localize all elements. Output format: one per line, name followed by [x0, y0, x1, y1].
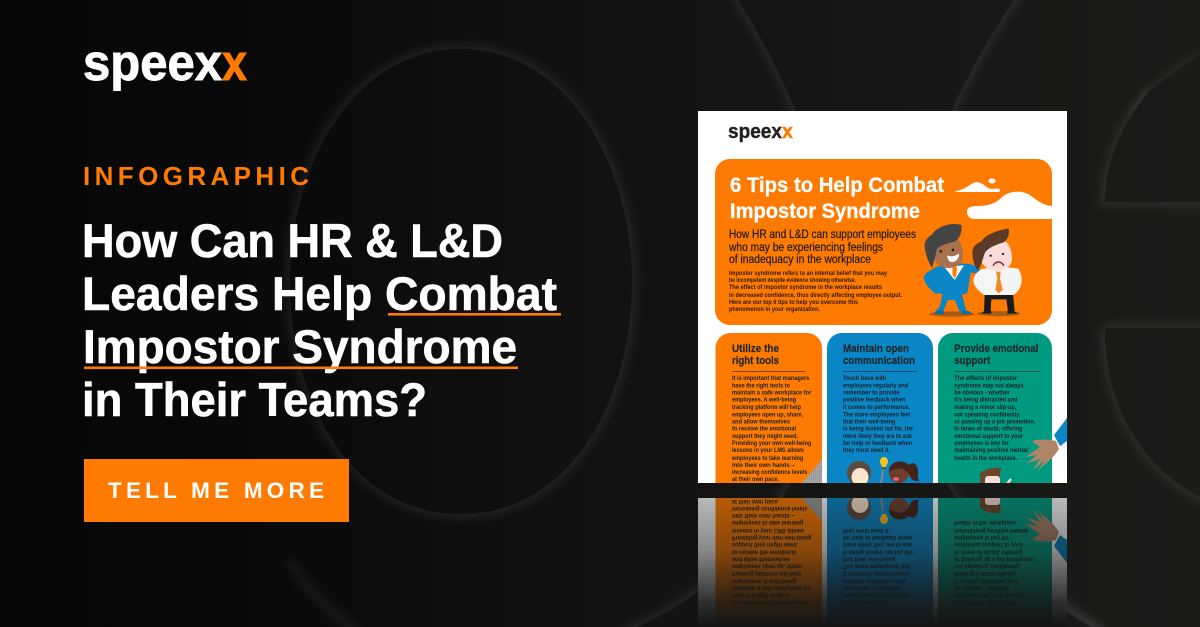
tip body: remember to provide [843, 390, 900, 397]
hero intro text: in decreased confidence, thus directly affecting employee output. [729, 292, 902, 299]
reflection of the infographic card: they most need it. [843, 527, 890, 534]
reflection of the infographic card: Providing your own well-being [732, 534, 811, 541]
illustration: two colleagues [924, 224, 1022, 317]
reflection of the infographic card: It is important that managers [732, 599, 810, 606]
reflection of the infographic card: maintaining positive mental [954, 527, 1028, 534]
tip body: that their well-being [843, 419, 895, 426]
reflection of the infographic card: maintain a safe workplace for [732, 584, 812, 591]
reflection of the infographic card: that their well-being [843, 555, 895, 562]
reflection of the infographic card: to receive the emotional [732, 548, 796, 555]
tip body: tracking platform will help [732, 404, 801, 411]
reflection of the infographic card: employees is key for [954, 534, 1009, 541]
tip body [954, 375, 1035, 462]
tip body: maintaining positive mental [954, 447, 1028, 454]
tip body: support they might need. [732, 433, 798, 440]
tip body: employees. A well-being [732, 397, 796, 404]
tip body: be obvious - whether [954, 390, 1010, 397]
icon: page corner [801, 460, 822, 484]
tip heading: communication [843, 355, 915, 367]
hero subtitle: How HR and L&D can support employees [729, 227, 916, 241]
tip body: for help or feedback when [843, 440, 912, 447]
reflection of the infographic card: be obvious - whether [954, 584, 1010, 591]
hero intro text: Here are our top 6 tips to help you overcome this [729, 299, 858, 306]
hero intro text: be incompetent despite evidence showing otherwise. [729, 277, 856, 284]
infographic preview card [698, 111, 1067, 523]
tip body: more likely they are to ask [843, 433, 912, 440]
hero intro text: Impostor syndrome refers to an internal belief that you may [729, 270, 887, 277]
call to action button [84, 459, 349, 522]
reflection of the infographic card: making a minor slip-up, [954, 570, 1016, 577]
call to action button: TELL ME MORE [108, 478, 324, 503]
tip body: it comes to performance. [843, 404, 910, 411]
reflection of the infographic card: employees open up, share, [732, 563, 803, 570]
reflection of the infographic card: into their own hands – [732, 512, 795, 519]
card logo: speex [728, 120, 783, 143]
tip body: increasing confidence levels [732, 469, 808, 476]
headline [82, 214, 561, 426]
hero intro text: phenomenon in your organization. [729, 306, 820, 313]
speexx logo: speex [83, 34, 222, 91]
hero subtitle: of inadequacy in the workplace [729, 252, 871, 266]
tip body: not speaking confidently, [954, 411, 1020, 418]
tip body: at their own pace. [732, 476, 779, 483]
tip heading [843, 344, 914, 364]
hero panel [715, 159, 1052, 325]
reflection of the infographic card: have the right tools to [732, 591, 790, 598]
tip body: The more employees feel [843, 411, 910, 418]
reflection of the infographic card: lessons in your LMS allows [732, 527, 804, 534]
reflection of the infographic card: at their own pace. [732, 498, 779, 505]
supportive colleague [924, 224, 980, 314]
tip body: The effects of impostor [954, 375, 1017, 382]
card logo: x [782, 120, 794, 143]
tip body: Providing your own well-being [732, 440, 811, 447]
headline: How Can HR & L&D [82, 214, 503, 267]
tip body: employees open up, share, [732, 411, 803, 418]
hero title: 6 Tips to Help Combat [730, 173, 944, 197]
tip body: they most need it. [843, 447, 890, 454]
reflection of the infographic card: increasing confidence levels [732, 505, 808, 512]
tip body [732, 375, 812, 483]
tip panel: utilize the right tools [716, 333, 822, 483]
reflection of the infographic card: The more employees feel [843, 563, 910, 570]
tip panel: provide emotional support [938, 333, 1067, 483]
reflection of the infographic card: it's being distracted and [954, 577, 1017, 584]
tip heading: Utilize the [732, 343, 779, 355]
tip body: into their own hands – [732, 462, 795, 469]
hero subtitle [728, 227, 916, 266]
reflection of the infographic card: is being looked out for, the [843, 548, 913, 555]
tip body: emotional support to your [954, 433, 1023, 440]
reflection of the infographic card: not speaking confidently, [954, 563, 1020, 570]
card logo [728, 126, 794, 142]
tip body: syndrome may not always [954, 383, 1024, 390]
tip panel: maintain open communication [827, 333, 933, 483]
headline: Leaders Help Combat [82, 267, 557, 320]
reflection of the infographic card: for help or feedback when [843, 534, 912, 541]
tip body: Touch base with [843, 375, 886, 382]
tip body: have the right tools to [732, 383, 790, 390]
tip heading [954, 343, 1038, 367]
tip body: employees is key for [954, 440, 1009, 447]
headline: in Their Teams? [82, 373, 427, 426]
tip body: positive feedback when [843, 397, 905, 404]
tip body: to receive the emotional [732, 426, 796, 433]
reflection of the infographic card: employees regularly and [843, 591, 908, 598]
reflection of the infographic card: or passing up a job promotion. [954, 555, 1035, 562]
illustration: small figure [980, 468, 1011, 485]
illustration: two women with light bulb [847, 457, 919, 483]
tip body: employees regularly and [843, 383, 908, 390]
tip heading: Maintain open [843, 343, 909, 355]
tip body: lessons in your LMS allows [732, 447, 804, 454]
tip body: health in the workplace. [954, 455, 1017, 462]
tip body: maintain a safe workplace for [732, 390, 812, 397]
hero title: Impostor Syndrome [730, 199, 920, 223]
reflection of the infographic card: employees to take learning [732, 519, 803, 526]
tip body: making a minor slip-up, [954, 404, 1016, 411]
reflection of the infographic card [698, 498, 1067, 621]
speexx logo: x [222, 34, 247, 91]
reflection of the infographic card: and allow themselves [732, 555, 790, 562]
tip body: is being looked out for, the [843, 426, 913, 433]
headline: Impostor Syndrome [83, 320, 517, 373]
tip body: it's being distracted and [954, 397, 1017, 404]
reflection of the infographic card: health in the workplace. [954, 519, 1017, 526]
reflection of the infographic card: remember to provide [843, 584, 900, 591]
reflection of the infographic card: emotional support to your [954, 541, 1023, 548]
reflection of the infographic card: it comes to performance. [843, 570, 910, 577]
tip body: employees to take learning [732, 455, 803, 462]
reflection of the infographic card: positive feedback when [843, 577, 905, 584]
hero subtitle: who may be experiencing feelings [728, 240, 883, 254]
tip body: or passing up a job promotion. [954, 419, 1035, 426]
tip heading: Provide emotional [954, 343, 1038, 355]
worried colleague [972, 229, 1022, 314]
tip body: and allow themselves [732, 419, 790, 426]
reflection of the infographic card: employees. A well-being [732, 577, 796, 584]
illustration: reaching hand [1026, 418, 1067, 471]
tip body: In times of doubt, offering [954, 426, 1022, 433]
hero intro text: The effect of impostor syndrome in the workplace results [729, 284, 882, 291]
tip heading [732, 343, 779, 367]
reflection of the infographic card: Touch base with [843, 599, 886, 606]
hero intro text [729, 270, 902, 313]
hero title [730, 173, 944, 223]
reflection of the infographic card: syndrome may not always [954, 591, 1024, 598]
tip body: It is important that managers [732, 375, 810, 382]
icon: clouds [955, 178, 1052, 219]
reflection of the infographic card: The effects of impostor [954, 599, 1017, 606]
eyebrow label: INFOGRAPHIC [83, 161, 309, 191]
reflection of the infographic card: In times of doubt, offering [954, 548, 1022, 555]
reflection of the infographic card: tracking platform will help [732, 570, 801, 577]
tip heading: support [954, 355, 991, 367]
reflection of the infographic card: more likely they are to ask [843, 541, 912, 548]
reflection of the infographic card: support they might need. [732, 541, 798, 548]
tip body [843, 375, 913, 454]
tip heading: right tools [732, 355, 779, 367]
